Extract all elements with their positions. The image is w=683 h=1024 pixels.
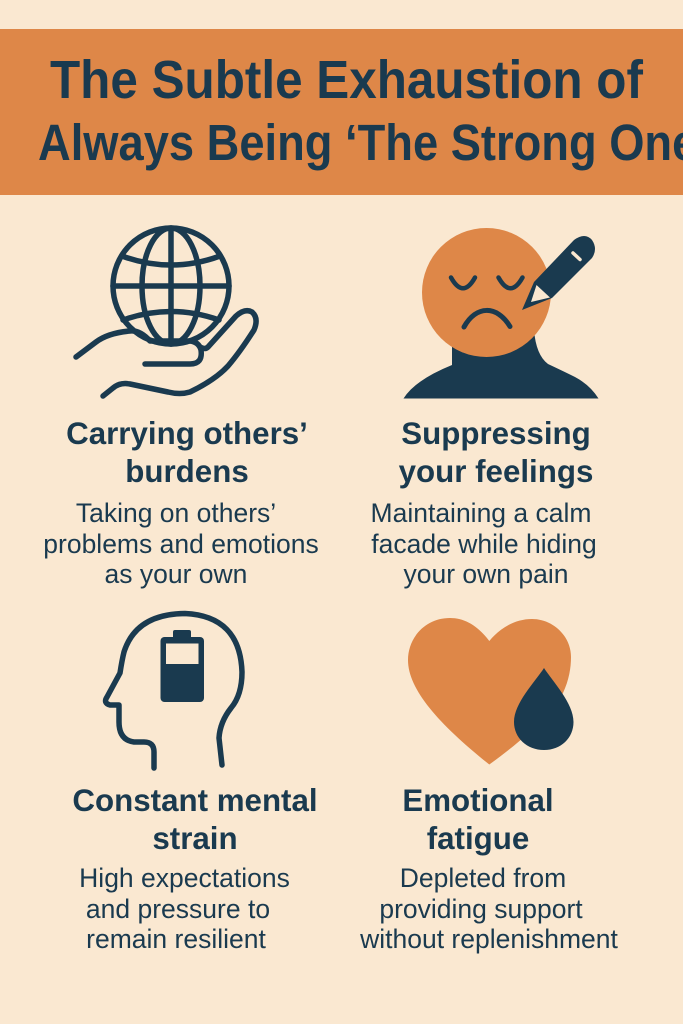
text: constant mental strain: remain resilient [86,924,266,954]
text: suppressing your feelings: Maintaining a calm [371,498,591,528]
title banner [0,29,683,195]
text: constant mental strain [79,863,290,954]
heading: suppressing your feelings [398,416,593,489]
text: suppressing your feelings: facade while hiding [371,528,597,558]
text: emotional fatigue: without replenishment [360,924,618,954]
heading: constant mental strain: Constant mental [72,783,318,818]
text: emotional fatigue: providing support [379,894,583,924]
text: constant mental strain: High expectations [79,863,290,893]
icon: heart with drop [408,618,574,764]
heading: emotional fatigue [402,783,554,856]
icon: hand holding globe [73,225,259,399]
heading: carrying others' burdens: Carrying others’ [66,416,308,451]
heading: carrying others' burdens: burdens [125,454,249,489]
text: carrying others' burdens: Taking on others’ [76,498,276,528]
text: carrying others' burdens: as your own [105,559,247,589]
text: suppressing your feelings [371,498,597,589]
icon: head with battery [102,610,245,771]
heading: constant mental strain [72,783,318,856]
heading: carrying others' burdens [66,416,308,489]
text: carrying others' burdens [43,498,319,589]
text: suppressing your feelings: your own pain [404,559,568,589]
heading: emotional fatigue: fatigue [427,821,529,856]
title line 1: The Subtle Exhaustion of [50,50,643,110]
title line 2: Always Being ‘The Strong One [38,114,683,171]
heading: suppressing your feelings: your feelings [399,454,593,489]
heading: emotional fatigue: Emotional [402,783,554,818]
heading: suppressing your feelings: Suppressing [401,416,591,451]
heading: constant mental strain: strain [152,821,238,856]
icon: sad face with pencil [404,228,598,398]
text: constant mental strain: and pressure to [86,894,270,924]
text: emotional fatigue [360,863,618,954]
text: carrying others' burdens: problems and emotions [43,528,319,558]
text: emotional fatigue: Depleted from [400,863,566,893]
